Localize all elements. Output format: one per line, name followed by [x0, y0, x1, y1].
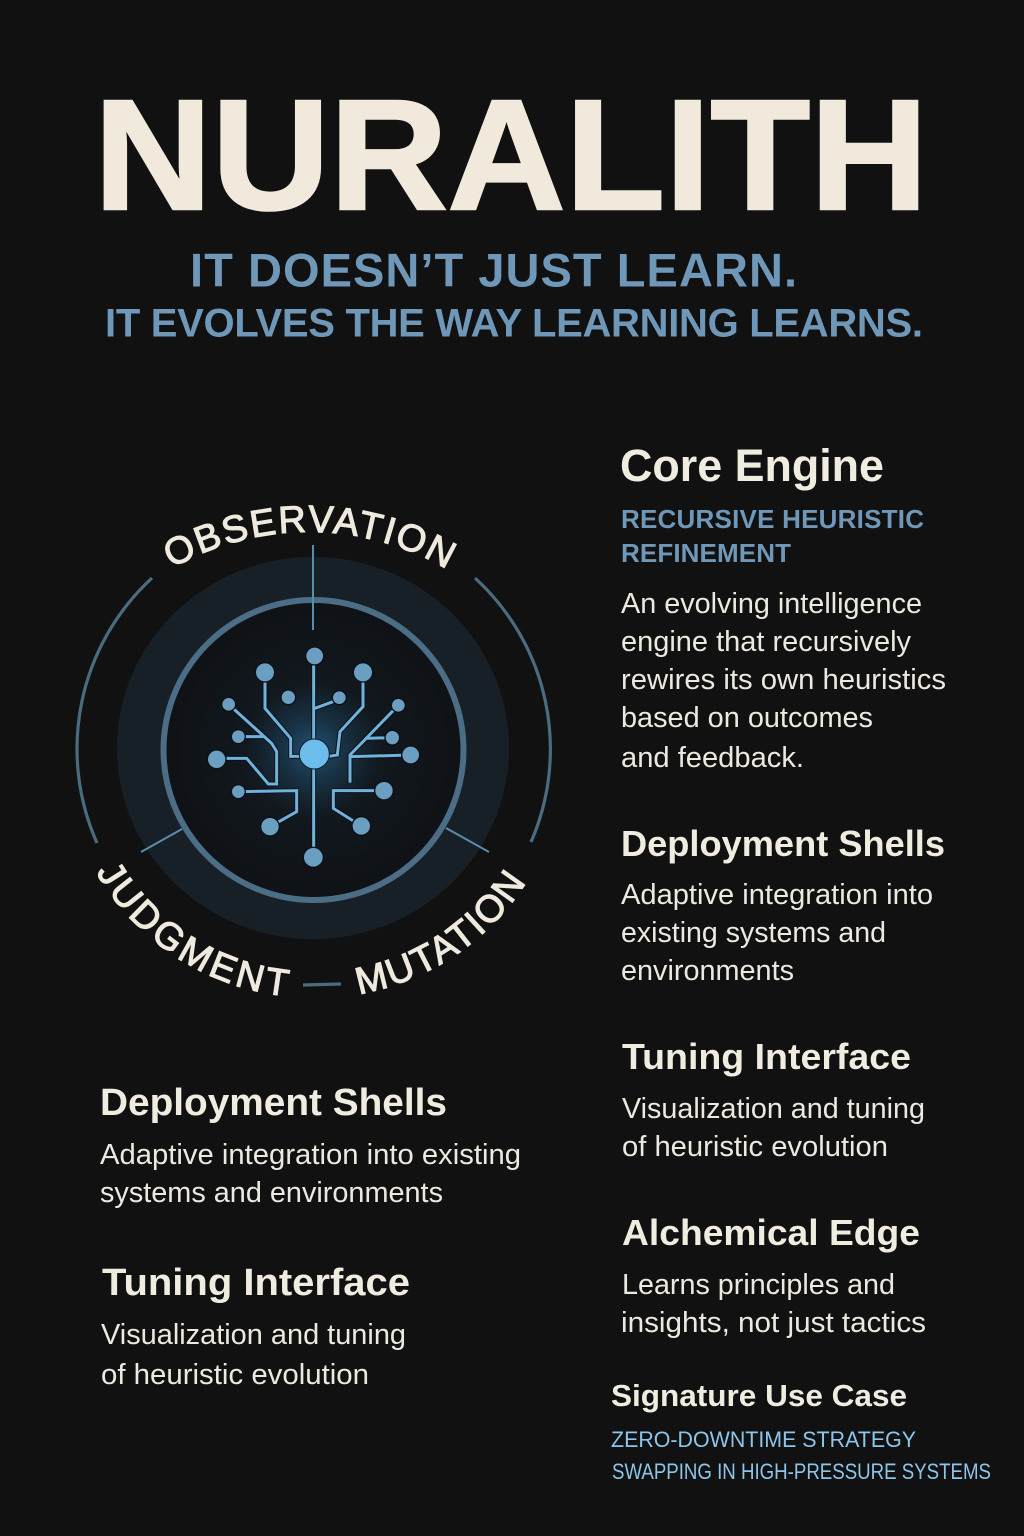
description: based on outcomes — [621, 702, 873, 734]
tagline: REFINEMENT — [621, 538, 791, 568]
description — [101, 1319, 406, 1391]
description — [622, 1093, 925, 1163]
description: Adaptive integration into — [621, 879, 933, 911]
panel: deployment shells left — [100, 1082, 521, 1209]
description: and feedback. — [621, 742, 804, 774]
panel: core engine — [620, 440, 946, 774]
panel: cycle diagram — [75, 505, 552, 996]
label: mutation: MUTATION — [355, 869, 526, 994]
label: judgment: JUDGMENT — [98, 864, 290, 996]
panel: tuning interface right — [622, 1036, 925, 1163]
heading: Alchemical Edge — [622, 1212, 920, 1253]
tagline: RECURSIVE HEURISTIC — [621, 504, 924, 534]
bottom dash — [303, 984, 341, 985]
description: insights, not just tactics — [621, 1307, 926, 1339]
panel: tuning interface left — [101, 1262, 410, 1391]
description — [621, 588, 946, 774]
description: of heuristic evolution — [101, 1359, 369, 1391]
panel: signature use case — [611, 1378, 991, 1484]
description: Adaptive integration into existing — [100, 1139, 521, 1171]
spoke lines — [141, 545, 489, 852]
panel: alchemical edge — [621, 1212, 926, 1339]
tagline — [621, 504, 924, 568]
description — [611, 1427, 991, 1484]
heading: Deployment Shells — [621, 823, 945, 864]
description: existing systems and — [621, 917, 886, 949]
description: Learns principles and — [622, 1269, 895, 1301]
title: NURALITH — [94, 68, 928, 243]
heading: Tuning Interface — [102, 1262, 410, 1304]
description — [100, 1139, 521, 1209]
description — [621, 1269, 926, 1339]
glow band ring — [117, 557, 509, 939]
description: Visualization and tuning — [101, 1319, 406, 1351]
subtitle: IT EVOLVES THE WAY LEARNING LEARNS. — [105, 302, 923, 346]
description: An evolving intelligence — [621, 588, 922, 620]
description: ZERO-DOWNTIME STRATEGY — [611, 1427, 916, 1452]
label: observation: OBSERVATION — [165, 505, 457, 568]
description — [621, 879, 933, 987]
description: systems and environments — [100, 1177, 443, 1209]
heading: Tuning Interface — [622, 1036, 911, 1077]
description: engine that recursively — [621, 626, 911, 658]
heading: Core Engine — [620, 440, 884, 491]
subtitle: IT DOESN’T JUST LEARN. — [190, 244, 797, 296]
outer arc right — [475, 578, 550, 842]
description: rewires its own heuristics — [621, 664, 946, 696]
description: of heuristic evolution — [622, 1131, 888, 1163]
inner ring with radial glow — [164, 600, 464, 900]
panel: deployment shells right — [621, 823, 945, 987]
description: environments — [621, 955, 794, 987]
subtitle — [105, 244, 923, 346]
heading: Signature Use Case — [611, 1378, 907, 1413]
icon: neural circuit tree — [207, 647, 420, 867]
heading: Deployment Shells — [100, 1082, 447, 1124]
outer arc left — [77, 578, 152, 843]
description: Visualization and tuning — [622, 1093, 925, 1125]
